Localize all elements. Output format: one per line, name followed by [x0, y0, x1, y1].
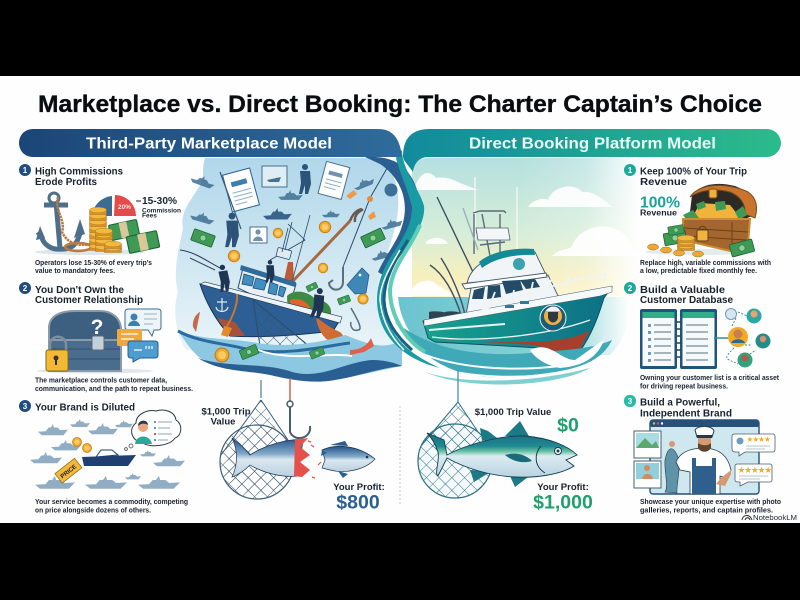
heading: High Commissions — [35, 166, 123, 178]
storm sky — [175, 158, 398, 362]
number badge: 1 — [628, 166, 633, 175]
profit label: Your Profit: — [333, 482, 385, 493]
number badge — [19, 164, 31, 176]
stat: 100% revenue: 100% — [640, 194, 680, 212]
callout: commission fees — [142, 196, 181, 220]
fish: whole tuna — [427, 421, 577, 487]
body text: a low, predictable fixed monthly fee. — [640, 266, 757, 275]
NotebookLM watermark: NotebookLM — [753, 513, 797, 522]
heading: Build a Powerful, — [640, 396, 720, 408]
engine boxes — [429, 311, 460, 320]
bow wake and waves — [395, 322, 612, 384]
fee value: $0 — [557, 414, 579, 436]
number badge: 2 — [23, 284, 28, 293]
hull — [200, 284, 340, 337]
number badge: 3 — [628, 397, 633, 406]
body text: for driving repeat business. — [640, 382, 728, 390]
review bubbles — [732, 434, 775, 486]
dashed centre divider — [399, 406, 401, 506]
body text: Showcase your unique expertise with photo — [640, 497, 782, 506]
fish: head section — [308, 441, 375, 478]
number badge — [19, 400, 31, 412]
icon: locked chest — [37, 311, 153, 374]
icon: locked chest: ? — [91, 316, 103, 339]
icon: treasure chest — [645, 184, 757, 257]
label: trip value: Value — [211, 416, 235, 428]
callout: commission fees: Fees — [142, 212, 157, 220]
heading: Erode Profits — [35, 176, 97, 188]
sinking fishing boat — [190, 209, 362, 346]
right item 3: independent brand — [624, 395, 782, 514]
thought bubble with person and checklist — [125, 410, 181, 450]
anchor emblem — [216, 298, 228, 312]
sport-fishing boat — [423, 197, 612, 358]
number badge: 1 — [23, 166, 28, 175]
panel: marketplace illustration — [175, 158, 404, 382]
number badge: 2 — [628, 284, 633, 293]
rope and float — [226, 294, 237, 328]
icon: crowd of boats — [30, 419, 185, 489]
cash and coins in the air — [191, 184, 398, 305]
icon: customer network — [726, 308, 770, 368]
net rope and hook — [261, 378, 310, 438]
header text: Direct Booking Platform Model — [469, 136, 716, 152]
body text: Your service becomes a commodity, competing — [35, 497, 188, 506]
dark figures tossed in the storm — [225, 164, 311, 247]
pie chart: commission share — [92, 195, 141, 216]
body text: galleries, reports, and captain profiles. — [640, 506, 773, 514]
stat: 100% revenue: Revenue — [640, 208, 678, 218]
heading: You Don't Own the — [35, 284, 124, 296]
header text: Third-Party Marketplace Model — [86, 136, 332, 152]
left item 2: customer relationship — [19, 282, 193, 393]
captain with fish — [665, 426, 731, 494]
mast and boom — [283, 262, 294, 285]
header: marketplace model — [19, 129, 402, 157]
icon: coin stacks and cash — [90, 207, 160, 253]
icon: chat bubbles — [117, 309, 161, 362]
net — [418, 402, 492, 498]
label: trip value: $1,000 Trip Value — [475, 407, 551, 418]
pie chart: commission share: 20% — [118, 204, 131, 211]
review bubbles: ★★★★ — [747, 436, 771, 444]
panel: direct booking illustration — [395, 158, 641, 384]
captain emblem — [540, 305, 566, 331]
body text: Replace high, variable commissions with — [640, 258, 771, 267]
big orange fish — [316, 318, 343, 343]
fish: large tail section — [232, 438, 310, 477]
profit value: $1,000 — [533, 492, 593, 514]
profit value: $800 — [336, 492, 380, 514]
number badge — [19, 282, 31, 294]
right item 2: customer database — [624, 282, 780, 390]
body text: value to mandatory fees. — [35, 266, 115, 275]
review bubbles: ★★★★★ — [738, 466, 773, 474]
heading: Keep 100% of Your Trip — [640, 166, 747, 178]
heading: Build a Valuable — [640, 284, 725, 296]
heading: Revenue — [640, 176, 687, 188]
fishing line and hook — [180, 163, 390, 330]
number badge — [624, 282, 636, 294]
heading: Customer Relationship — [35, 294, 143, 306]
body text: Operators lose 15-30% of every trip's — [35, 258, 152, 267]
cabin — [465, 275, 560, 320]
infographic sheet — [0, 76, 800, 523]
number badge: 3 — [23, 402, 28, 411]
header: direct model — [403, 129, 781, 172]
body text: The marketplace controls customer data, — [35, 376, 167, 384]
sea — [398, 297, 630, 355]
hull — [423, 287, 612, 357]
body text: Owning your customer list is a critical asset — [640, 373, 780, 382]
portholes — [505, 301, 529, 308]
body text: communication, and the path to repeat business. — [35, 384, 193, 393]
floating boat silhouettes — [189, 172, 404, 262]
S-curve wave divider — [365, 150, 440, 368]
rope — [457, 370, 459, 402]
title: Marketplace vs. Direct Booking: The Charter Captain’s Choice — [38, 91, 762, 118]
number badge — [624, 395, 636, 407]
cabin — [238, 268, 296, 312]
icon: highlighted boat and price tag: PRICE — [60, 464, 78, 480]
calm sky — [412, 158, 640, 300]
callout: commission fees: 15-30% — [142, 196, 177, 207]
clouds — [412, 173, 640, 296]
number badge — [624, 164, 636, 176]
net — [253, 300, 309, 346]
stormy waves — [177, 312, 402, 382]
right item 1: keep revenue — [624, 164, 771, 275]
icon: address book — [640, 309, 728, 369]
label: trip value: $1,000 Trip — [201, 406, 251, 418]
icon: highlighted boat and price tag — [55, 438, 136, 483]
sky fade — [520, 158, 641, 300]
fishermen — [217, 260, 326, 319]
marketplace profit: torn fish in net — [201, 378, 385, 514]
body text: on price alongside dozens of others. — [35, 506, 151, 514]
heading: Your Brand is Diluted — [35, 402, 135, 414]
icon: captain website — [634, 420, 775, 494]
heading: Customer Database — [640, 294, 733, 306]
net — [220, 398, 294, 499]
callout: commission fees: Commission — [142, 208, 181, 214]
left item 1: high commissions — [19, 164, 181, 275]
bow rail — [478, 274, 605, 312]
profit label: Your Profit: — [537, 482, 589, 493]
tower — [430, 197, 508, 318]
direct profit: whole fish in net — [418, 370, 593, 514]
left item 3: brand diluted — [19, 400, 188, 514]
icon: anchor and rope — [35, 193, 145, 255]
catch pile — [287, 292, 331, 320]
contract documents — [220, 161, 350, 243]
price tag — [347, 268, 369, 294]
heading: Independent Brand — [640, 408, 732, 420]
photo gallery — [634, 431, 661, 488]
